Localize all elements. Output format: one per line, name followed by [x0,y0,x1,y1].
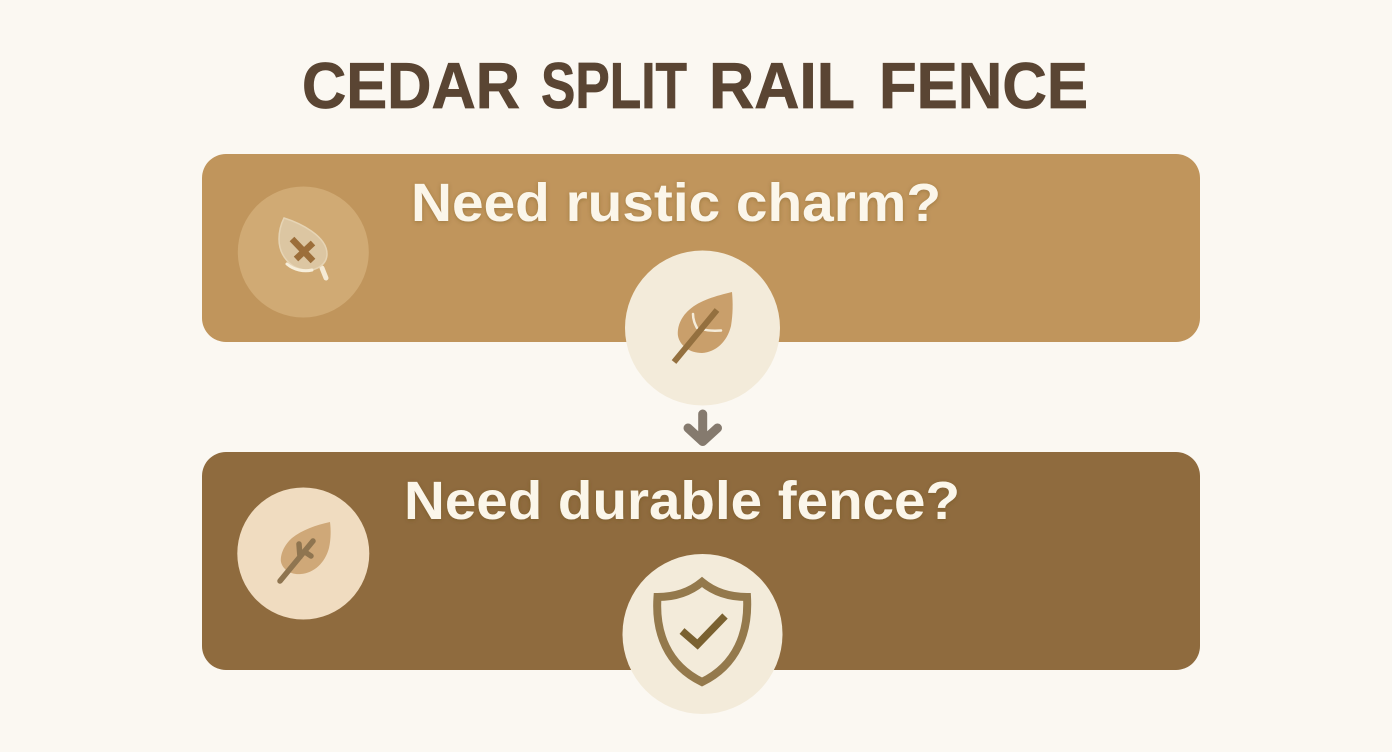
icon: shield with check [622,554,782,714]
icon: leaf with twig [237,488,369,620]
title: FENCE [879,49,1088,122]
title: RAIL [709,49,855,122]
title [302,49,1088,122]
panel: need durable fence [202,452,1200,714]
panel background [202,452,1200,670]
heading: need durable fence: Need durable fence? [404,471,960,531]
panel background [202,154,1200,342]
arrow: down [688,414,718,442]
panel: need rustic charm [202,154,1200,406]
title: CEDAR [302,49,520,122]
title: SPLIT [541,49,687,122]
icon: leaf badge [625,250,780,406]
icon: crossed-out leaf [238,186,369,318]
heading: need rustic charm: Need rustic charm? [411,173,941,233]
